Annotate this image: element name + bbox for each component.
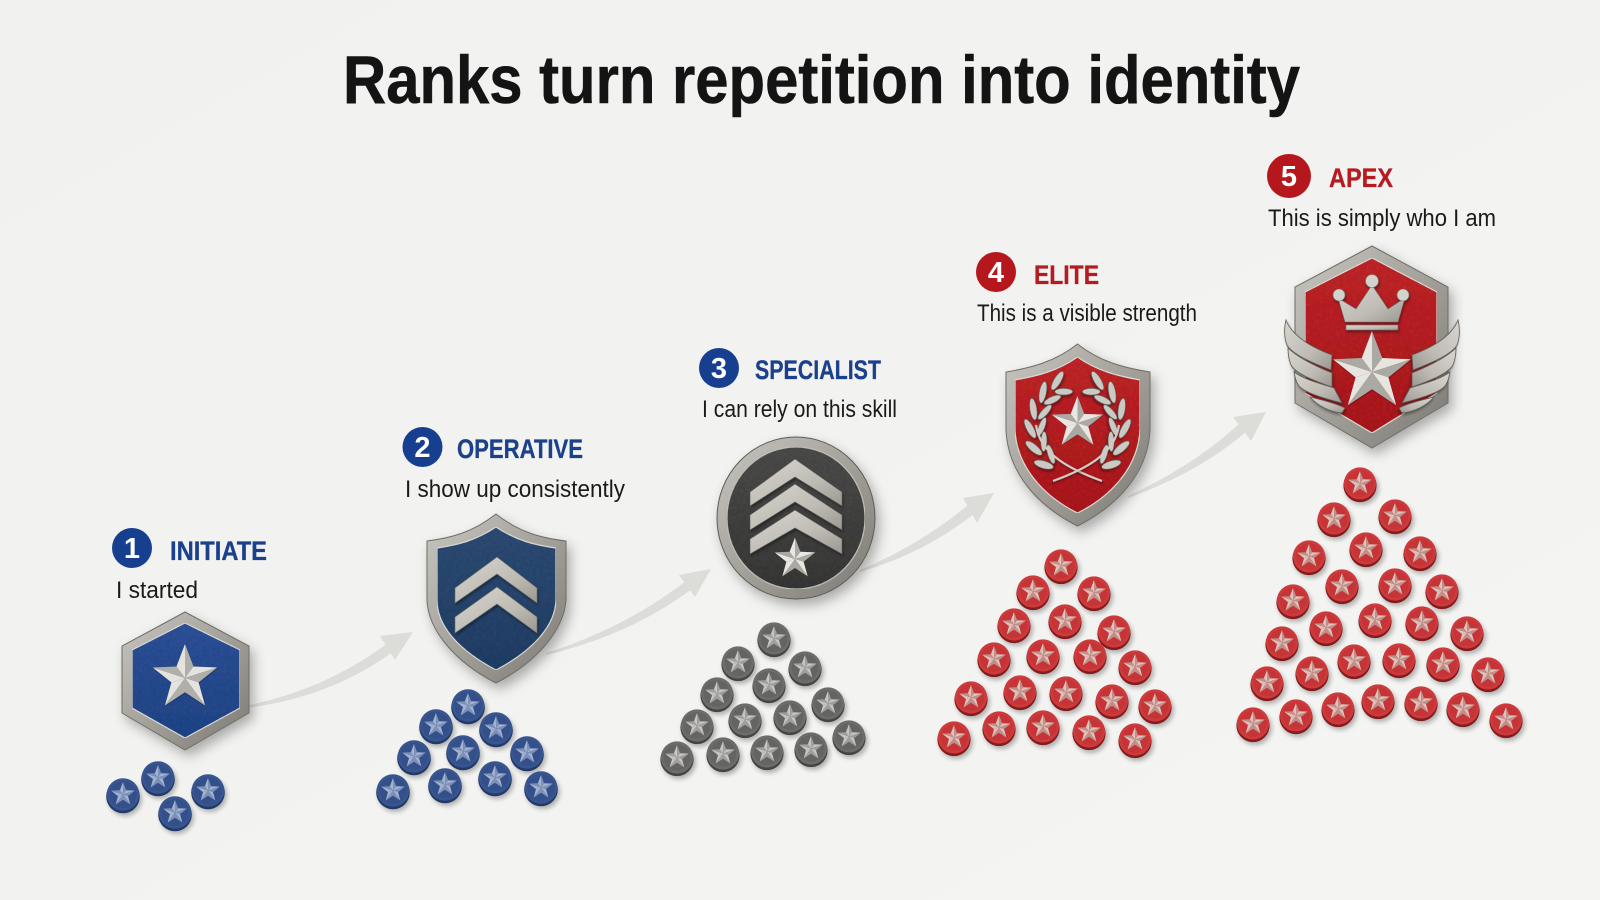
panel: rank 2 operative <box>376 427 625 812</box>
icon: hexagon star badge <box>122 612 249 750</box>
arrow: rank 2 to rank 3 <box>546 569 711 655</box>
icon: laurel shield badge <box>1006 344 1150 526</box>
icon: crown and winged star badge <box>1285 246 1459 448</box>
heading: elite: ELITE <box>1034 260 1099 290</box>
number marker 3 <box>699 348 739 388</box>
arrow: rank 4 to rank 5 <box>1128 412 1266 498</box>
heading: initiate: INITIATE <box>170 536 267 566</box>
tagline: I can rely on this skill <box>702 396 897 423</box>
arrow: rank 3 to rank 4 <box>860 493 994 572</box>
number marker 1: 1 <box>124 533 140 565</box>
heading: specialist: SPECIALIST <box>755 355 881 385</box>
coins: 14 grey <box>660 622 868 779</box>
panel: rank 4 elite <box>937 252 1197 761</box>
tagline: I started <box>116 577 198 604</box>
number marker 1 <box>112 528 152 568</box>
coins: 4 blue <box>106 761 227 834</box>
heading: operative: OPERATIVE <box>457 434 583 464</box>
arrow: rank 1 to rank 2 <box>245 632 413 708</box>
heading: apex: APEX <box>1329 163 1393 193</box>
number marker 4: 4 <box>988 257 1004 289</box>
number marker 2 <box>402 427 442 467</box>
number marker 5 <box>1267 154 1311 198</box>
icon: round chevron badge <box>717 437 875 599</box>
tagline: I show up consistently <box>405 476 625 503</box>
panel: rank 5 apex <box>1236 154 1525 745</box>
panel: rank 1 initiate <box>106 528 267 834</box>
number marker 3: 3 <box>711 353 727 385</box>
icon: chevron shield badge <box>427 514 566 683</box>
number marker 5: 5 <box>1281 161 1297 193</box>
tagline: This is a visible strength <box>977 300 1197 327</box>
coins: 20 red <box>937 549 1174 761</box>
title: Ranks turn repetition into identity <box>343 42 1300 118</box>
number marker 4 <box>976 252 1016 292</box>
tagline: This is simply who I am <box>1268 205 1496 232</box>
panel: rank 3 specialist <box>660 348 897 779</box>
coins: 28 red <box>1236 467 1525 745</box>
coins: 10 blue <box>376 689 560 812</box>
number marker 2: 2 <box>414 432 431 464</box>
